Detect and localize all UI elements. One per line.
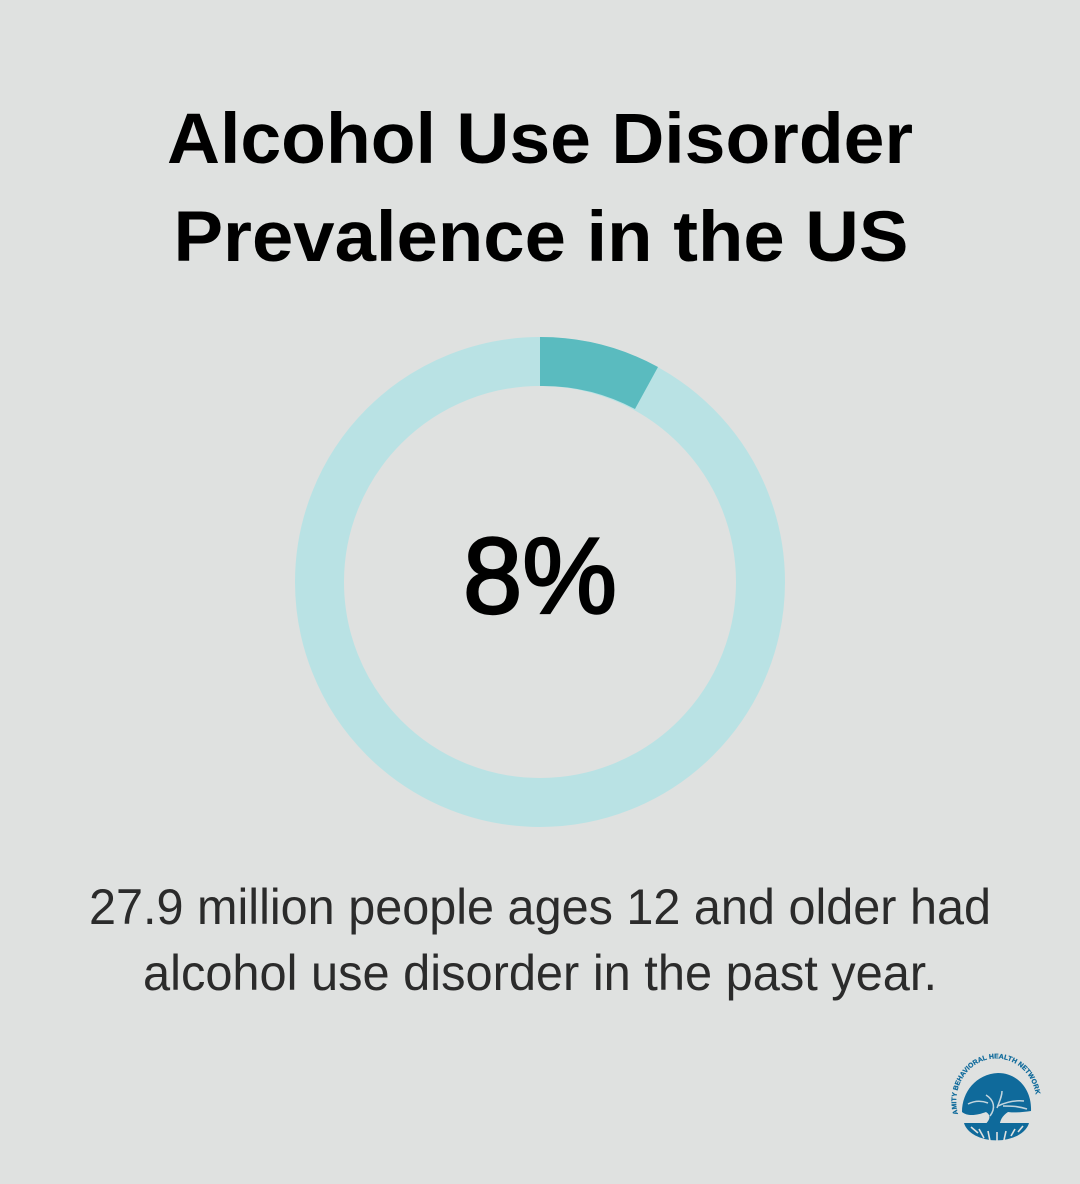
- center percentage: 8%: [463, 515, 617, 636]
- logo tree canopy: [962, 1073, 1031, 1128]
- description text: 27.9 million people ages 12 and older had: [89, 879, 991, 935]
- logo text: AMITY BEHAVIORAL HEALTH NETWORK: [951, 1054, 1040, 1114]
- title: Prevalence in the US: [174, 198, 908, 277]
- title: Alcohol Use Disorder: [167, 100, 913, 179]
- title: [167, 100, 913, 277]
- donut chart: [320, 337, 760, 802]
- logo trunk and roots: [964, 1123, 1029, 1140]
- logo root lines: [971, 1126, 1023, 1141]
- chart segment: 8% highlighted: [540, 337, 658, 409]
- logo: Amity Behavioral Health Network: [951, 1054, 1040, 1140]
- description text: alcohol use disorder in the past year.: [143, 945, 937, 1001]
- logo tree branches: [968, 1091, 1027, 1116]
- description text: [89, 879, 991, 1001]
